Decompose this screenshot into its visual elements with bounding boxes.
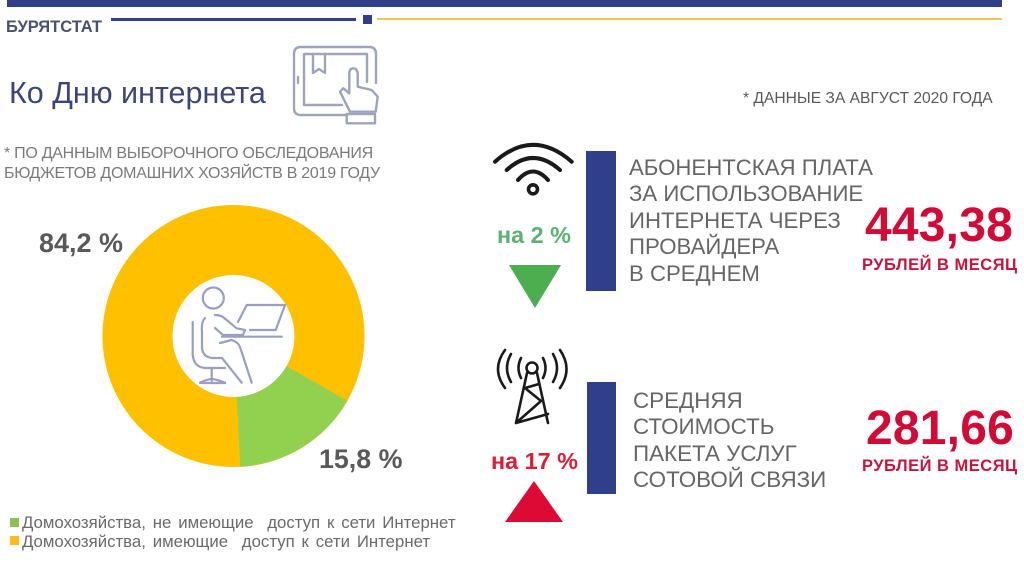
- description: mobile package: СРЕДНЯЯ: [633, 388, 743, 413]
- description: mobile package: СОТОВОЙ СВЯЗИ: [633, 467, 826, 492]
- icon: cell tower: [496, 348, 568, 424]
- header line: gold: [377, 18, 1002, 20]
- legend: [10, 513, 456, 551]
- note: survey source: БЮДЖЕТОВ ДОМАШНИХ ХОЗЯЙСТВ В 2019 ГОДУ: [4, 164, 380, 182]
- description: mobile package: СТОИМОСТЬ: [633, 414, 774, 439]
- icon: wifi: [492, 142, 574, 196]
- description: mobile package: ПАКЕТА УСЛУГ: [633, 441, 797, 466]
- legend text: has access: Домохозяйства, имеющие доступ к сети Интернет: [22, 532, 430, 551]
- change label: up 17%: на 17 %: [491, 448, 578, 474]
- icon: person at laptop: [193, 288, 285, 383]
- arrow: down: [509, 265, 561, 308]
- header line: navy: [111, 18, 356, 21]
- arrow: up: [505, 481, 563, 522]
- description: subscription fee: В СРЕДНЕМ: [629, 261, 760, 286]
- description: mobile package: [633, 388, 826, 492]
- legend swatch: has access: [10, 536, 19, 545]
- note: data date: * ДАННЫЕ ЗА АВГУСТ 2020 ГОДА: [743, 90, 993, 107]
- description: subscription fee: ИНТЕРНЕТА ЧЕРЕЗ: [629, 208, 841, 233]
- legend text: no access: Домохозяйства, не имеющие доступ к сети Интернет: [22, 513, 456, 532]
- header square: [363, 15, 372, 24]
- description: subscription fee: [629, 155, 873, 286]
- note: survey source: [4, 145, 380, 182]
- description: subscription fee: АБОНЕНТСКАЯ ПЛАТА: [629, 155, 873, 180]
- value: 443,38: 443,38: [865, 199, 1013, 252]
- icon: tablet with pointing hand: [292, 46, 379, 124]
- donut chart: [102, 205, 364, 467]
- slice: no internet access: [237, 366, 347, 467]
- title: Ко Дню интернета: [9, 76, 266, 110]
- label: 15,8 %: 15,8 %: [319, 444, 402, 474]
- description: subscription fee: ПРОВАЙДЕРА: [629, 234, 779, 259]
- description: subscription fee: ЗА ИСПОЛЬЗОВАНИЕ: [629, 181, 863, 206]
- brand label: БУРЯТСТАТ: [6, 18, 102, 36]
- note: survey source: * ПО ДАННЫМ ВЫБОРОЧНОГО ОБСЛЕДОВАНИЯ: [4, 145, 373, 162]
- unit: rubles per month: РУБЛЕЙ В МЕСЯЦ: [862, 256, 1018, 274]
- panel bar: subscription: [586, 151, 616, 291]
- slice: with internet access: [138, 240, 330, 432]
- legend swatch: no access: [10, 518, 19, 527]
- top banner bar: [7, 0, 1002, 7]
- label: 84,2 %: 84,2 %: [39, 228, 123, 258]
- value: 281,66: 281,66: [866, 402, 1014, 455]
- change label: down 2%: на 2 %: [497, 222, 571, 248]
- unit: rubles per month: РУБЛЕЙ В МЕСЯЦ: [862, 457, 1018, 475]
- panel bar: mobile: [587, 382, 616, 494]
